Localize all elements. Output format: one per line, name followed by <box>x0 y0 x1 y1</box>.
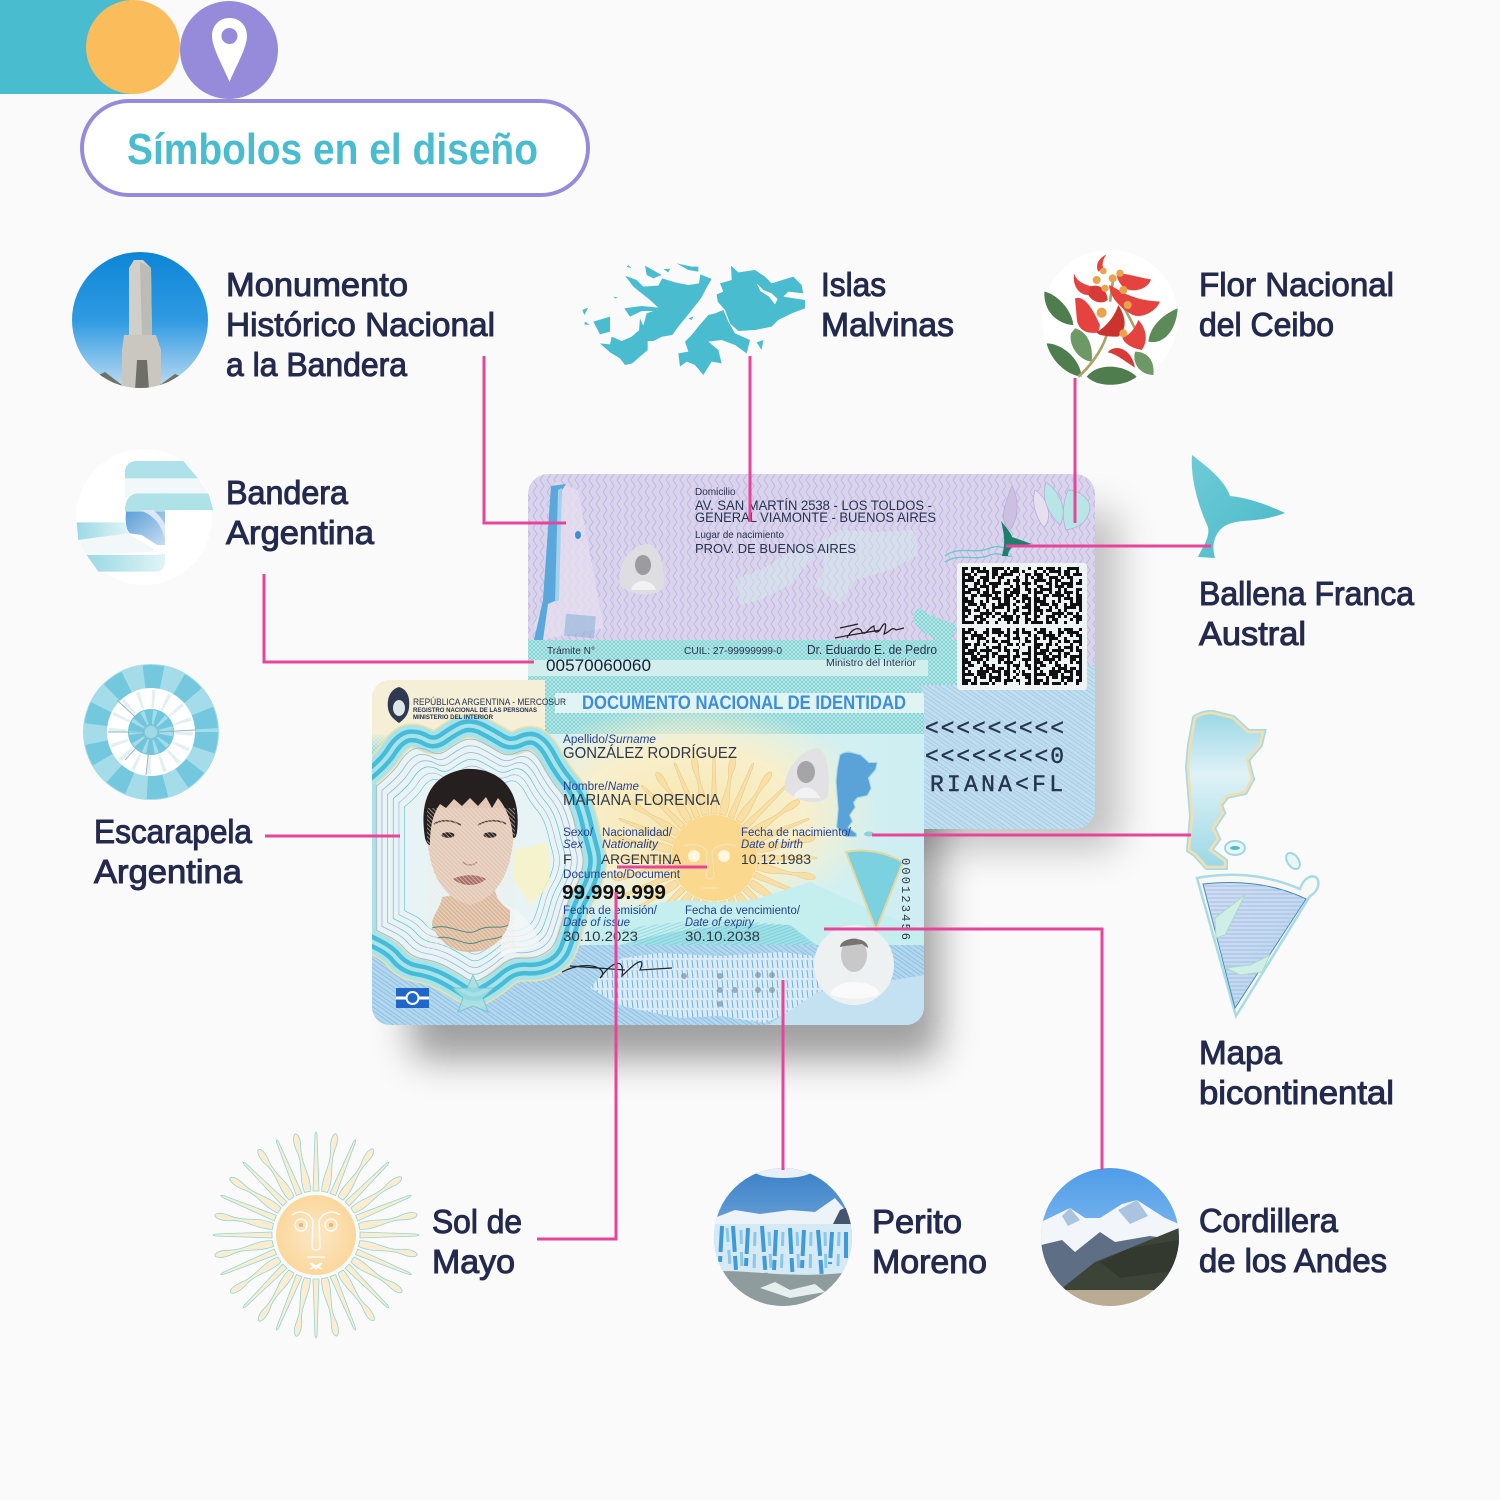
serial number: 000123456 <box>898 858 912 940</box>
personal data text: 30.10.2038 <box>685 928 760 944</box>
label <box>821 266 954 343</box>
label: Cordillera <box>1199 1202 1339 1239</box>
icon: rosette <box>83 664 219 800</box>
personal data text: Date of expiry <box>685 917 755 929</box>
item: Islas Malvinas <box>582 263 954 375</box>
item: Monumento <box>72 252 495 392</box>
signature <box>562 962 672 978</box>
connector lines <box>264 356 1211 1239</box>
issuer text: REGISTRO NACIONAL DE LAS PERSONAS <box>413 707 538 714</box>
personal data text: ARGENTINA <box>601 851 682 867</box>
icon: bicontinental map <box>1188 713 1318 1016</box>
label: a la Bandera <box>226 346 408 383</box>
connector: Escarapela <box>265 834 400 838</box>
label: Malvinas <box>821 306 954 343</box>
photo: glacier <box>714 1162 852 1306</box>
label: Flor Nacional <box>1199 266 1394 303</box>
photo: mountains <box>1041 1168 1179 1306</box>
QR code <box>957 563 1087 690</box>
title pill <box>82 101 588 195</box>
personal data text: 10.12.1983 <box>741 852 811 867</box>
purple circle <box>180 1 278 99</box>
address text: Lugar de nacimiento <box>695 530 784 541</box>
personal data text: GONZÁLEZ RODRÍGUEZ <box>563 745 737 762</box>
personal data text: Fecha de vencimiento/ <box>685 905 801 917</box>
top beige corner <box>372 680 552 755</box>
lower blue texture <box>918 665 1095 829</box>
issuer text <box>413 697 566 721</box>
personal data text: Nombre/Name <box>563 781 639 793</box>
connector: Cordillera <box>824 929 1102 1170</box>
label: Perito <box>872 1203 962 1240</box>
connector: Monumento <box>484 356 566 523</box>
personal data text: Sex <box>563 839 584 851</box>
ghost portrait <box>619 544 664 594</box>
monument watermark <box>533 482 604 640</box>
label: Monumento <box>226 266 408 303</box>
label <box>94 813 253 890</box>
personal data text: F <box>563 851 572 867</box>
small Antarctic sector <box>846 850 903 930</box>
label: Argentina <box>94 853 243 890</box>
connector: Ballena <box>1006 544 1211 548</box>
machine readable zone: RIANA<FL <box>930 772 1063 798</box>
procedure and minister text: Trámite N° <box>547 646 595 657</box>
connector: Perito Moreno <box>782 980 784 1170</box>
title: Símbolos en el diseño <box>127 125 538 174</box>
sun <box>610 754 818 907</box>
panel: DNI front card <box>365 680 924 1025</box>
orange circle <box>86 0 180 94</box>
label: Bandera <box>226 474 349 511</box>
icon: location pin <box>212 18 247 82</box>
wave ribbon <box>913 608 957 640</box>
bottom blue texture <box>372 945 924 1025</box>
address text: GENERAL VIAMONTE - BUENOS AIRES <box>695 510 936 525</box>
personal data text: Date of birth <box>741 839 803 851</box>
personal data text: Date of issue <box>563 917 630 929</box>
item: Escarapela <box>83 664 253 890</box>
label: Moreno <box>872 1243 987 1280</box>
address text <box>695 487 936 556</box>
label: de los Andes <box>1199 1242 1387 1279</box>
label: Ballena Franca <box>1199 575 1415 612</box>
personal data text: Fecha de nacimiento/ <box>741 827 852 839</box>
label: del Ceibo <box>1199 306 1334 343</box>
signature <box>835 624 904 638</box>
personal data text: 99.999.999 <box>562 882 666 904</box>
label <box>1199 1202 1387 1279</box>
item: Bandera Argentina <box>76 449 375 585</box>
label: Mapa <box>1199 1034 1283 1071</box>
whale tail watermark <box>1001 521 1032 556</box>
connector: Sol de Mayo <box>537 867 707 1239</box>
label <box>1199 266 1394 343</box>
procedure and minister text: 00570060060 <box>546 656 651 675</box>
label <box>432 1203 522 1280</box>
card title: DOCUMENTO NACIONAL DE IDENTIDAD <box>582 693 906 714</box>
teal block <box>0 0 130 94</box>
connector: Mapa <box>872 834 1191 836</box>
label: Argentina <box>226 514 375 551</box>
top crosshatch band <box>545 680 924 734</box>
label <box>872 1203 987 1280</box>
item: Sol de Mayo <box>213 1132 522 1338</box>
ceibo flower watermark <box>1003 482 1090 530</box>
ghost portrait round <box>814 925 894 1005</box>
wavy guilloche frame <box>365 726 595 994</box>
address text: Domicilio <box>695 487 736 498</box>
personal data text: Apellido/Surname <box>563 734 656 746</box>
card shadows <box>410 510 1120 1060</box>
item: Ballena Franca Austral <box>1192 455 1415 652</box>
personal data text: 30.10.2023 <box>563 928 638 944</box>
icon: Malvinas map <box>582 263 805 375</box>
back card background <box>528 474 1095 829</box>
personal data text: Documento/Document <box>563 869 681 881</box>
ghost portrait small <box>785 748 829 802</box>
photo: monument <box>72 252 208 392</box>
icon: sun <box>213 1132 419 1338</box>
connector: Bandera <box>264 574 534 662</box>
issuer text: REPÚBLICA ARGENTINA - MERCOSUR <box>413 697 566 708</box>
portrait <box>423 769 540 958</box>
mountain band <box>590 882 923 945</box>
personal data text: Fecha de emisión/ <box>563 905 658 917</box>
glacier <box>590 952 840 1023</box>
machine readable zone: <<<<<<<<0 <box>925 744 1064 770</box>
small Argentina map <box>836 752 877 837</box>
connector: Flor Nacional <box>1074 378 1076 523</box>
machine readable zone: <<<<<<<<< <box>925 716 1064 742</box>
header decoration <box>0 0 278 99</box>
personal data text: Nacionalidad/ <box>602 827 673 839</box>
issuer text: MINISTERIO DEL INTERIOR <box>413 714 493 721</box>
label <box>226 266 495 383</box>
machine readable zone <box>926 721 1063 792</box>
procedure and minister text: Ministro del Interior <box>826 658 917 669</box>
personal data text: Nationality <box>602 839 659 851</box>
item: Cordillera de los Andes <box>1041 1168 1387 1306</box>
item: Perito Moreno <box>714 1162 987 1306</box>
signature band <box>528 640 958 685</box>
Mercosur flag <box>396 988 429 1008</box>
label: bicontinental <box>1199 1074 1394 1111</box>
procedure and minister text: CUIL: 27-99999999-0 <box>684 646 782 657</box>
label: Austral <box>1199 615 1306 652</box>
hologram patch <box>514 842 550 905</box>
Malvinas watermark <box>735 530 918 605</box>
pill outline <box>82 101 588 195</box>
warm sun glow <box>560 712 864 908</box>
braille dots <box>681 972 775 1007</box>
address text: PROV. DE BUENOS AIRES <box>695 541 856 556</box>
icon: ceibo flower <box>1042 250 1178 386</box>
label: Sol de <box>432 1203 522 1240</box>
water waves <box>945 547 1012 562</box>
icon: flag ribbon <box>76 449 213 585</box>
left crosshatch patch <box>372 735 388 755</box>
label: Escarapela <box>94 813 253 850</box>
label: Histórico Nacional <box>226 306 495 343</box>
item: Flor Nacional del Ceibo <box>1042 250 1394 386</box>
icon: whale tail <box>1192 455 1285 558</box>
label <box>226 474 375 551</box>
personal data text: Sexo/ <box>563 827 594 839</box>
procedure and minister text: Dr. Eduardo E. de Pedro <box>807 643 937 657</box>
procedure and minister text <box>546 644 936 671</box>
personal data text: MARIANA FLORENCIA <box>563 792 721 809</box>
personal data text <box>562 734 852 944</box>
coat of arms <box>388 687 409 723</box>
item: Mapa bicontinental <box>1188 713 1394 1111</box>
address text: AV. SAN MARTÍN 2538 - LOS TOLDOS - <box>695 498 932 513</box>
small stars emblem <box>452 975 494 1012</box>
front card background <box>372 680 924 1025</box>
label <box>1199 1034 1394 1111</box>
label <box>1199 575 1415 652</box>
panel: DNI back card <box>528 474 1095 830</box>
label: Islas <box>821 266 886 303</box>
connector: Islas Malvinas <box>748 356 752 522</box>
label: Mayo <box>432 1243 515 1280</box>
